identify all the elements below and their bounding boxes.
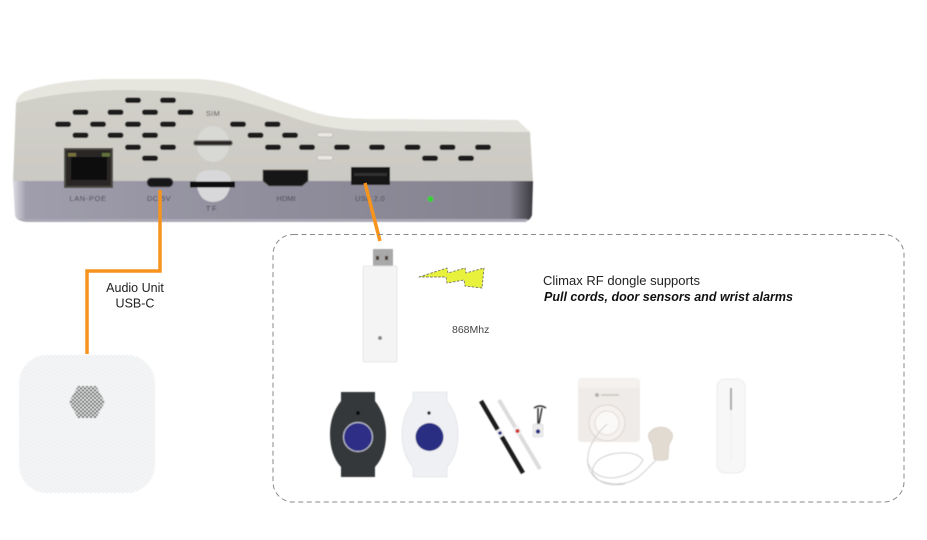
USB dongle (363, 249, 397, 362)
connector: dongle cable (365, 183, 380, 241)
router base (13, 181, 533, 222)
black pendant button (330, 392, 386, 477)
port labels: LAN-POE (69, 194, 107, 203)
port labels: SIM (206, 109, 220, 118)
description text (543, 273, 793, 304)
label: audio unit: USB-C (116, 296, 154, 310)
white pendant button (402, 392, 458, 477)
USB-C port (147, 178, 173, 187)
port labels: DC 5V (147, 194, 171, 203)
connector: audio unit cable (87, 190, 160, 354)
green LED (428, 196, 433, 202)
RF signal bolt (419, 268, 484, 288)
SIM slot (194, 126, 232, 162)
ventilation slots (55, 98, 491, 161)
door sensor (717, 379, 745, 473)
light slots (317, 132, 333, 160)
wrist straps and pendant (481, 400, 546, 473)
label: frequency: 868Mhz (452, 324, 489, 336)
router shell (13, 79, 533, 182)
base lower edge (18, 219, 528, 222)
label: audio unit: Audio Unit (106, 281, 164, 295)
USB port (351, 167, 390, 185)
dashed panel: RF accessories (273, 234, 904, 502)
audio unit speaker (19, 355, 155, 493)
port labels (69, 109, 385, 213)
router device (13, 79, 533, 222)
pull cord alarm (578, 378, 673, 485)
HDMI port (263, 170, 308, 186)
port labels: TF (206, 204, 218, 213)
TF slot (190, 170, 235, 202)
description text: Climax RF dongle supports (543, 273, 700, 288)
port labels: HDMI (276, 194, 296, 203)
router top edge (16, 79, 530, 132)
LAN port (64, 148, 113, 188)
port labels: USB 2.0 (355, 194, 385, 203)
speaker grille (69, 386, 105, 418)
description text: Pull cords, door sensors and wrist alarms (544, 290, 793, 304)
